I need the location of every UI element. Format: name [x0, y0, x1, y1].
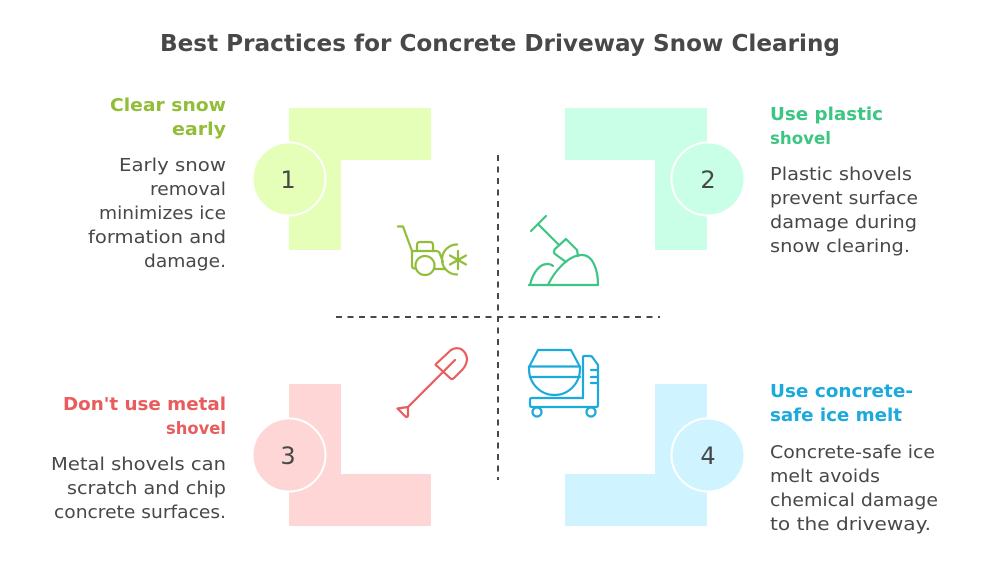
icon: snow blower	[398, 226, 466, 275]
text block 3: don't use metal shovel: Metal shovels can	[51, 455, 226, 475]
text block 4: use concrete-safe ice melt: chemical damage	[770, 491, 938, 511]
text block 1: clear snow early: minimizes ice	[99, 204, 226, 224]
text block 1: clear snow early: damage.	[144, 252, 226, 272]
number badge 4	[672, 418, 744, 492]
number badge 2	[672, 142, 744, 216]
text block 3: don't use metal shovel	[51, 394, 226, 523]
text block 4: use concrete-safe ice melt: Use concrete-	[770, 381, 913, 402]
text block 1: clear snow early: formation and	[88, 228, 226, 248]
text block 3: don't use metal shovel: scratch and chip	[67, 479, 226, 499]
number badge 3: 3	[280, 442, 296, 470]
text block 3: don't use metal shovel: Don't use metal	[63, 394, 226, 415]
text block 2: use plastic shovel: prevent surface	[770, 189, 918, 209]
text block 2: use plastic shovel: Use plastic	[770, 104, 883, 125]
text block 2: use plastic shovel: shovel	[770, 129, 831, 149]
text block 4: use concrete-safe ice melt: melt avoids	[770, 467, 880, 487]
number badge 1: 1	[280, 166, 296, 194]
text block 2: use plastic shovel: snow clearing.	[770, 237, 910, 257]
icon: concrete mixer	[529, 350, 598, 416]
text block 1: clear snow early: Early snow	[119, 156, 226, 176]
panel: L-shape 4	[565, 384, 707, 526]
text block 4: use concrete-safe ice melt	[770, 381, 938, 535]
number badge 1	[252, 142, 326, 216]
text block 1: clear snow early: Clear snow	[110, 95, 226, 116]
text block 4: use concrete-safe ice melt: safe ice melt	[770, 405, 902, 426]
text block 3: don't use metal shovel: shovel	[166, 419, 226, 439]
number badge 2: 2	[700, 166, 716, 194]
text block 4: use concrete-safe ice melt: Concrete-safe ice	[770, 443, 935, 463]
panel: L-shape 3	[289, 384, 431, 526]
number badge 4: 4	[700, 442, 716, 470]
panel: L-shape 2	[565, 108, 707, 250]
title: Best Practices for Concrete Driveway Snow Clearing	[160, 31, 840, 57]
text block 4: use concrete-safe ice melt: to the driveway.	[770, 515, 931, 535]
panel: L-shape 1	[289, 108, 431, 250]
text block 3: don't use metal shovel: concrete surfaces.	[54, 503, 226, 523]
text block 1: clear snow early: removal	[150, 180, 226, 200]
number badge 3	[252, 418, 326, 492]
text block 1: clear snow early	[88, 95, 226, 272]
text block 2: use plastic shovel: damage during	[770, 213, 917, 233]
text block 1: clear snow early: early	[172, 119, 226, 140]
text block 2: use plastic shovel: Plastic shovels	[770, 165, 912, 185]
text block 2: use plastic shovel	[770, 104, 918, 257]
icon: metal shovel	[398, 348, 467, 417]
icon: shovel in snow pile	[529, 216, 598, 285]
